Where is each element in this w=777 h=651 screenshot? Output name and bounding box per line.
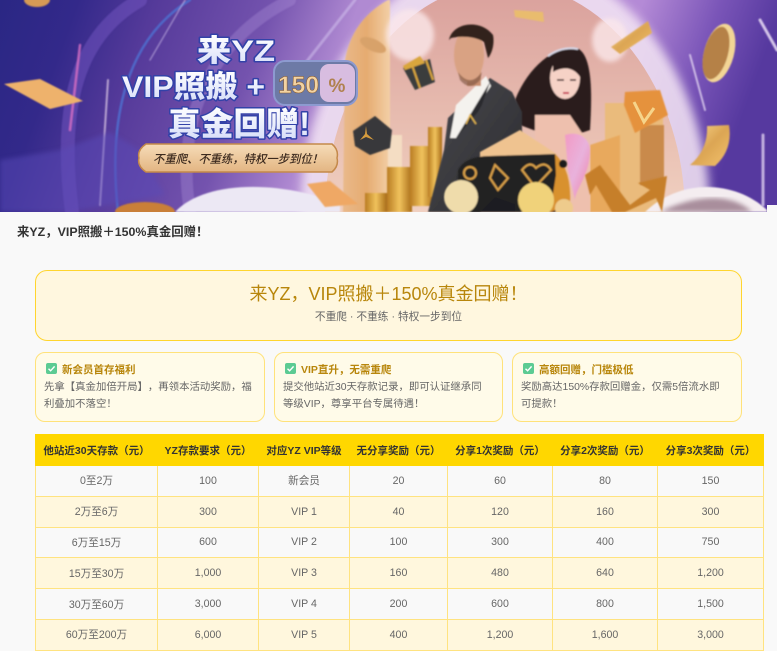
reward table: 150 bbox=[702, 475, 719, 487]
reward table: 6万至15万 bbox=[72, 537, 121, 549]
reward table: 60万至200万 bbox=[66, 629, 127, 641]
card: high bonus bbox=[512, 352, 742, 422]
reward table: VIP 3 bbox=[291, 567, 317, 579]
gift box bbox=[403, 56, 435, 90]
dark hill shape bbox=[0, 132, 165, 212]
reward table: 1,200 bbox=[697, 567, 724, 579]
card: new member benefit bbox=[35, 352, 265, 422]
dark dice bbox=[353, 116, 392, 155]
150 percent badge: 150 bbox=[278, 72, 319, 99]
card text bbox=[521, 381, 720, 410]
reward table: 无分享奖励（元） bbox=[356, 444, 440, 456]
gold arrow bbox=[585, 165, 667, 212]
reward table: 160 bbox=[390, 567, 407, 579]
reward table: 120 bbox=[491, 506, 509, 518]
icon: check bbox=[523, 363, 534, 374]
coin stacks bbox=[365, 127, 442, 212]
reward table: 640 bbox=[596, 567, 614, 579]
reward table: 3,000 bbox=[195, 598, 221, 610]
card text: 提交他站近30天存款记录，即可认证继承同 bbox=[283, 382, 482, 393]
reward table: 0至2万 bbox=[80, 475, 113, 487]
reward table: 1,500 bbox=[697, 598, 724, 610]
reward table: 300 bbox=[491, 536, 509, 548]
reward table: 2万至6万 bbox=[75, 506, 118, 518]
reward table: 30万至60万 bbox=[69, 599, 124, 611]
man bbox=[428, 24, 522, 212]
page intro line: 来YZ，VIP照搬＋150%真金回赠！ bbox=[17, 225, 208, 239]
reward table: 200 bbox=[390, 598, 407, 610]
reward table: 新会员 bbox=[288, 475, 320, 487]
card text: 利叠加不落空！ bbox=[44, 399, 117, 410]
150 percent badge bbox=[274, 61, 357, 105]
reward table: VIP 4 bbox=[291, 598, 317, 610]
banner subtitle plaque bbox=[139, 144, 337, 172]
hero panel bbox=[35, 270, 742, 341]
card text: 先拿【真金加倍开局】，再领本活动奖励，福 bbox=[44, 382, 252, 393]
floating coins bbox=[24, 0, 741, 222]
reward table: 3,000 bbox=[697, 629, 724, 641]
icon: check bbox=[46, 363, 57, 374]
reward table: 分享1次奖励（元） bbox=[455, 444, 545, 456]
card heading: 新会员首存福利 bbox=[62, 364, 136, 376]
reward table: 他站近30天存款（元） bbox=[43, 444, 150, 456]
reward table: 分享2次奖励（元） bbox=[560, 444, 650, 456]
reward table: 80 bbox=[599, 475, 611, 487]
reward table: VIP 2 bbox=[291, 536, 317, 548]
reward table: 40 bbox=[393, 506, 404, 518]
golden towers bbox=[388, 103, 664, 212]
reward table: 100 bbox=[390, 536, 407, 548]
reward table: 对应YZ VIP等级 bbox=[266, 444, 342, 456]
reward table: VIP 1 bbox=[291, 506, 317, 518]
dome glow bbox=[300, 0, 710, 473]
card text: 奖励高达150%存款回赠金，仅需5倍流水即 bbox=[521, 382, 720, 393]
card: VIP upgrade bbox=[274, 352, 503, 422]
orange gem bbox=[624, 90, 668, 133]
reward table: 400 bbox=[596, 536, 614, 548]
banner heading: VIP照搬 + bbox=[122, 71, 265, 104]
reward table: 400 bbox=[390, 629, 407, 641]
banner illustration bbox=[0, 0, 777, 212]
golden arch pillar bbox=[343, 0, 390, 212]
card text: 可提款！ bbox=[521, 399, 563, 410]
banner heading bbox=[122, 35, 310, 142]
reward table: 1,200 bbox=[487, 629, 513, 641]
banner heading: 来YZ bbox=[197, 35, 275, 68]
icon: check bbox=[285, 363, 296, 374]
card text: 等级VIP，尊享平台专属待遇！ bbox=[283, 399, 424, 410]
card heading: VIP直升，无需重爬 bbox=[301, 364, 391, 376]
reward table: VIP 5 bbox=[291, 629, 317, 641]
card heading: 高额回赠，门槛极低 bbox=[539, 364, 634, 376]
reward table: 600 bbox=[199, 536, 217, 548]
reward table: 1,600 bbox=[592, 629, 618, 641]
150 percent badge: % bbox=[329, 76, 346, 97]
reward table: 300 bbox=[702, 506, 719, 518]
silver ring and orb bbox=[175, 187, 340, 212]
reward table: 800 bbox=[596, 598, 614, 610]
reward table: 160 bbox=[596, 506, 614, 518]
reward table: 15万至30万 bbox=[69, 568, 124, 580]
sparkle clouds bbox=[386, 9, 628, 62]
slot machine and cards bbox=[444, 130, 573, 218]
card text bbox=[283, 381, 482, 410]
vip tickets bbox=[4, 10, 730, 207]
reward table: YZ存款要求（元） bbox=[165, 444, 251, 456]
reward table: 20 bbox=[393, 475, 404, 487]
hero title: 来YZ，VIP照搬＋150%真金回赠！ bbox=[249, 284, 528, 304]
hero subtitle: 不重爬 · 不重练 · 特权一步到位 bbox=[315, 311, 462, 323]
reward table: 6,000 bbox=[195, 629, 221, 641]
reward table: 300 bbox=[199, 506, 217, 518]
card text bbox=[44, 381, 252, 410]
reward table bbox=[35, 434, 764, 651]
reward table: 分享3次奖励（元） bbox=[666, 444, 755, 456]
white corner of image edge bbox=[767, 205, 777, 212]
reward table: 750 bbox=[702, 536, 719, 548]
reward table: 60 bbox=[494, 475, 506, 487]
woman bbox=[515, 47, 591, 212]
reward table: 1,000 bbox=[195, 567, 221, 579]
banner subtitle plaque: 不重爬、不重练，特权一步到位！ bbox=[153, 153, 323, 166]
reward table: 100 bbox=[199, 475, 217, 487]
reward table: 480 bbox=[491, 567, 509, 579]
reward table: 600 bbox=[491, 598, 509, 610]
banner heading: 真金回赠! bbox=[168, 106, 310, 142]
